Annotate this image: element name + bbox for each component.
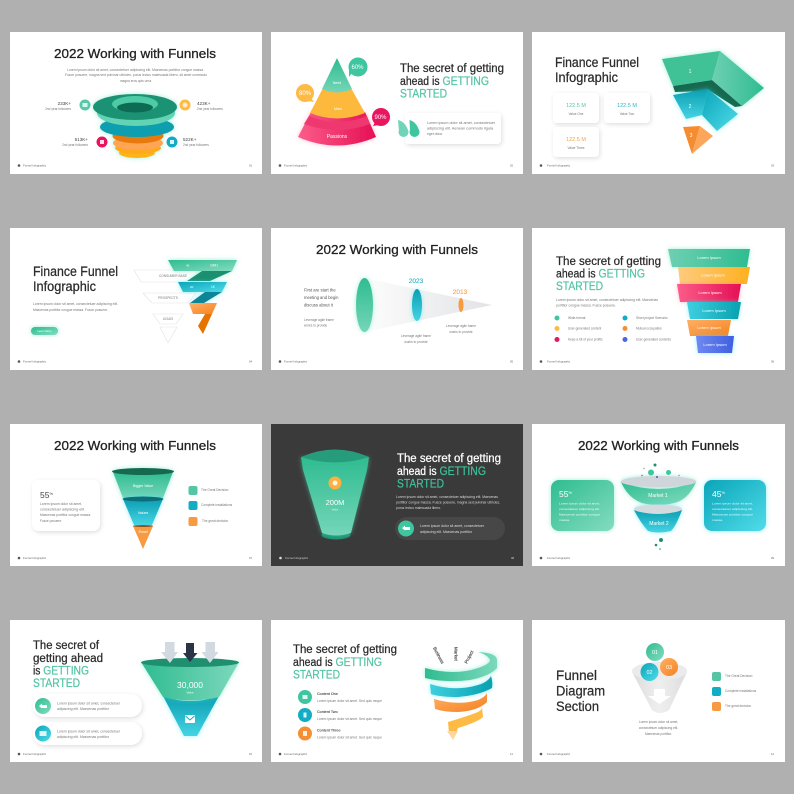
heading <box>555 55 639 85</box>
footer: Funnel Infographic <box>284 752 308 756</box>
stat 522K: 2nd year followers <box>183 143 209 147</box>
green layer: 10M1 <box>210 264 218 268</box>
heading: 2022 Working with Funnels <box>54 46 217 61</box>
teal stat card: consectetuer adipiscing elit. <box>712 507 753 511</box>
stat 423K <box>180 100 223 111</box>
stat 513K: 2nd year followers <box>62 143 88 147</box>
year 2023: 2023 <box>409 278 424 285</box>
ball 01: 01 <box>652 650 658 656</box>
intro text: Fusce posuere, magna sed pulvinar ultricies, purus lectus malesuada libero, sit amet commodo <box>65 73 207 77</box>
stat card: Maecenas porttitor congue massa. <box>40 513 91 517</box>
body text: porttitor congue massa. Fusce posuere. <box>556 304 616 308</box>
green section: 1 <box>689 69 692 75</box>
value caption: Value <box>332 508 339 512</box>
footer: Funnel Infographic <box>284 360 308 364</box>
footer <box>540 360 775 364</box>
note middle <box>401 334 431 344</box>
footer <box>540 164 775 168</box>
note left: Leverage agile frame <box>304 318 334 322</box>
footer: Funnel Infographic <box>23 360 47 364</box>
quote card: eget dolor. <box>427 132 443 136</box>
teal stat card: Lorem ipsum dolor sit amet, <box>712 502 753 506</box>
body text: porttitor congue massa. Fusce posuere, magna sed pulvinar ultricies, <box>396 500 500 504</box>
ribbon arrow tip <box>447 731 458 740</box>
heading <box>33 640 103 690</box>
stat 233K: 233K+ <box>58 101 71 106</box>
body text: purus lectus malesuada libero. <box>396 506 441 510</box>
footer: 03 <box>771 164 775 168</box>
panel: slide 1 stacked ring funnel <box>10 32 262 174</box>
orange layer <box>189 303 217 334</box>
legend: Complete installations <box>201 503 233 507</box>
panel: slide 11 spiral funnel <box>271 620 523 762</box>
value caption: Value <box>187 690 194 694</box>
footer: Funnel Infographic <box>23 164 47 168</box>
teal stat card: Maecenas porttitor congue <box>712 512 753 516</box>
footer: Funnel Infographic <box>547 164 571 168</box>
ball 02 <box>640 663 658 681</box>
value card three: 122.5 M <box>566 137 586 143</box>
panel: slide 7 three-stage funnel <box>10 424 262 566</box>
footer: Funnel Infographic <box>285 556 309 560</box>
callout pill one: Lorem ipsum dolor sit amet, consectetuer <box>57 702 121 706</box>
footer <box>18 360 253 364</box>
footer <box>18 556 253 560</box>
button: Learn More <box>37 329 52 333</box>
teal layer: 20 <box>190 285 194 289</box>
funnel <box>112 468 174 549</box>
teal stat card: % <box>721 490 725 495</box>
heading: STARTED <box>293 670 340 682</box>
heading <box>556 256 661 293</box>
heading: The secret of getting <box>397 453 501 465</box>
heading: Diagram <box>556 684 605 698</box>
footer: 07 <box>249 556 253 560</box>
funnel base <box>322 530 350 540</box>
value card three: Value Three <box>567 146 585 150</box>
caption: Lorem ipsum dolor sit amet, <box>639 720 678 724</box>
quote card <box>405 113 501 144</box>
green stat card: Maecenas porttitor congue <box>559 512 600 516</box>
funnel bowl: market 1 <box>621 476 696 505</box>
footer: Funnel Infographic <box>547 752 571 756</box>
heading <box>397 453 501 490</box>
content item three: Content Three <box>317 728 341 732</box>
icon: orange badge <box>328 476 342 490</box>
footer: Funnel Infographic <box>284 164 308 168</box>
pill callout: Lorem ipsum dolor sit amet, consectetuer <box>420 524 485 528</box>
value card two: 122.5 M <box>617 103 637 109</box>
legend: The Great Decision <box>725 674 753 678</box>
teal layer <box>178 282 227 303</box>
stat 423K: 2nd year followers <box>197 107 223 111</box>
stat 423K: 423K+ <box>197 101 211 106</box>
panel: slide 12 funnel diagram section <box>532 620 785 762</box>
rotated label project: Project <box>463 649 475 664</box>
layer teal: Lorem Ipsum <box>702 308 726 313</box>
heading: STARTED <box>556 281 603 293</box>
stat 522K: 522K+ <box>183 137 197 142</box>
heading: Finance Funnel <box>555 55 639 70</box>
footer: 09 <box>771 556 775 560</box>
body text: Lorem ipsum dolor sit amet, consectetuer adipiscing elit. Maecenas <box>556 298 658 302</box>
footer: Funnel Infographic <box>547 360 571 364</box>
heading: STARTED <box>397 478 444 490</box>
green stat card: consectetuer adipiscing elit. <box>559 507 600 511</box>
callout pill two: adipiscing elit. Maecenas porttitor <box>57 735 110 739</box>
quote card: Lorem ipsum dolor sit amet, consectetuer <box>427 121 496 125</box>
callout pill two: Lorem ipsum dolor sit amet, consectetuer <box>57 730 121 734</box>
green stat card <box>551 480 614 531</box>
intro note: meeting and begin <box>304 295 339 300</box>
stat card: 55 <box>40 490 49 500</box>
orange section: 3 <box>690 133 693 139</box>
heading: ahead is GETTING <box>556 268 645 280</box>
arrow right <box>202 642 218 663</box>
content item two <box>298 708 382 722</box>
outlined funnel shapes <box>134 270 205 343</box>
funnel bowl: market 2 <box>634 504 682 532</box>
bubble 90 percent <box>372 108 390 126</box>
legend: The Great Decision <box>201 488 229 492</box>
note left: works to provide <box>304 324 327 328</box>
heading: Infographic <box>33 279 96 294</box>
rotated label market: Market <box>454 647 458 662</box>
green layer <box>168 260 237 281</box>
value card two: Value Two <box>620 112 635 116</box>
rotated label business: Business <box>432 646 445 665</box>
body text: Lorem ipsum dolor sit amet, consectetuer adipiscing elit. Maecenas <box>396 495 498 499</box>
teal stat card: massa. <box>712 518 723 522</box>
footer: Funnel Infographic <box>23 752 47 756</box>
bullet list <box>554 316 671 342</box>
body text <box>33 302 118 312</box>
coloured funnel shapes <box>168 260 237 334</box>
heading: 2022 Working with Funnels <box>316 242 479 257</box>
intro text <box>65 68 207 83</box>
teal section: 2 <box>689 104 692 110</box>
ball 03: 03 <box>666 665 672 671</box>
content item two: Lorem ipsum dolor sit amet. Sed quis neque <box>317 717 382 721</box>
ball 01 <box>646 643 664 661</box>
caption <box>639 720 678 736</box>
teal layer: 1K <box>211 285 216 289</box>
legend: The great decision <box>202 519 228 523</box>
heading <box>400 63 504 100</box>
heading <box>33 264 118 294</box>
note right: works to provide <box>449 330 473 334</box>
pill callout <box>395 517 505 540</box>
heading <box>556 668 605 714</box>
bullet list: User generated contents <box>636 338 671 342</box>
bullet list: Wide-format <box>568 316 585 320</box>
stat 513K: 513K+ <box>75 137 88 142</box>
icon: quote marks <box>398 120 420 137</box>
note left <box>304 318 334 328</box>
layer yellow: Lorem Ipsum <box>701 272 725 278</box>
panel: slide 4 split funnel <box>10 228 262 370</box>
legend <box>188 486 233 526</box>
heading: Funnel <box>556 668 597 683</box>
funnel bowl: market 1: Market 1 <box>648 493 668 499</box>
particles top <box>641 464 680 478</box>
middle stage: Values <box>138 511 149 515</box>
panel: slide 10 arrow funnel <box>10 620 262 762</box>
ellipse green <box>356 278 373 332</box>
funnel glass <box>301 450 369 540</box>
heading: The secret of getting <box>400 63 504 75</box>
heading: ahead is GETTING <box>397 466 486 478</box>
pyramid top layer: Need <box>333 81 341 85</box>
bullet list: Mutual occupation <box>636 326 662 330</box>
footer <box>279 556 515 560</box>
pyramid graphic <box>298 58 376 146</box>
heading: The secret of getting <box>556 256 661 268</box>
layer blue: Lorem Ipsum <box>703 342 727 347</box>
value card one: Value One <box>569 112 584 116</box>
year 2013: 2013 <box>453 289 468 296</box>
green stat card: massa. <box>559 518 570 522</box>
top stage: Bigger Value <box>133 484 153 488</box>
heading <box>293 644 397 682</box>
heading: Infographic <box>555 70 618 85</box>
funnel rim <box>141 658 239 667</box>
arrow centre <box>183 643 198 662</box>
ring funnel graphic <box>93 94 177 158</box>
intro note: First are start the <box>304 288 336 292</box>
caption: Maecenas porttitor. <box>645 732 672 736</box>
footer: 08 <box>511 556 515 560</box>
green stat card: % <box>568 490 572 495</box>
funnel bowl: market 2: Market 2 <box>649 521 669 527</box>
button <box>31 327 58 335</box>
legend: Complete installations <box>725 689 757 693</box>
content item three: Lorem ipsum dolor sit amet. Sed quis neque <box>317 736 382 740</box>
body text <box>556 298 658 308</box>
legend <box>712 672 757 711</box>
panel: slide 3 3D funnel <box>532 32 785 174</box>
callout pill two <box>33 722 142 745</box>
spiral ribbon <box>425 652 497 740</box>
footer <box>279 164 514 168</box>
pyramid middle layer: Main <box>334 107 342 111</box>
stat card: % <box>49 491 53 496</box>
panel: slide 9 two-market funnel <box>532 424 785 566</box>
footer: 04 <box>249 360 253 364</box>
ribbon green <box>425 652 497 681</box>
content item two: Content Two <box>317 710 338 714</box>
bubble 80 percent <box>296 84 314 102</box>
bullet list: Short project Scenario <box>636 316 668 320</box>
footer: 10 <box>249 752 253 756</box>
value: 30,000 <box>177 680 203 690</box>
note middle: Leverage agile frame <box>401 334 431 338</box>
body text <box>396 495 500 510</box>
ball 03 <box>660 658 678 676</box>
ellipse teal <box>412 289 422 321</box>
footer <box>279 752 513 756</box>
bubble 80 percent: 80% <box>299 91 312 97</box>
value card one <box>553 93 599 123</box>
bullet list: Keep a bit of your profits <box>568 338 603 342</box>
outlined funnel shapes: PROSPECTS <box>158 296 178 300</box>
stat 513K <box>62 136 108 148</box>
heading: is GETTING <box>33 666 89 678</box>
value card one: 122.5 M <box>566 103 586 109</box>
funnel green section <box>141 662 239 700</box>
stat card <box>32 480 100 531</box>
panel: slide 5 timeline cone <box>271 228 523 370</box>
stat 522K <box>166 136 209 148</box>
bubble 90 percent: 90% <box>374 115 387 121</box>
icon: envelope <box>185 715 195 723</box>
content item one <box>298 690 382 704</box>
content item one: Lorem ipsum dolor sit amet. Sed quis neque <box>317 699 382 703</box>
caption: consectetuer adipiscing elit. <box>639 726 678 730</box>
outlined funnel shapes: LEADS <box>163 317 173 321</box>
footer: 01 <box>249 164 253 168</box>
stat 233K <box>45 100 90 111</box>
bubble 60 percent <box>348 58 368 77</box>
footer: 02 <box>510 164 514 168</box>
icon: down arrow <box>648 689 671 704</box>
grey funnel <box>632 662 687 713</box>
footer <box>18 752 253 756</box>
footer: 11 <box>510 752 513 756</box>
funnel teal section <box>163 696 219 736</box>
intro text: Lorem ipsum dolor sit amet, consectetuer adipiscing elit. Maecenas porttitor congue massa. <box>67 68 204 72</box>
heading: ahead is GETTING <box>293 657 382 669</box>
footer: 05 <box>510 360 514 364</box>
intro note: discuss about it <box>304 302 334 308</box>
footer: Funnel Infographic <box>547 556 571 560</box>
body text: Maecenas porttitor congue massa. Fusce posuere. <box>33 308 108 312</box>
content item one: Content One <box>317 692 338 696</box>
ribbon orange <box>434 693 487 712</box>
footer <box>279 360 514 364</box>
pill callout: adipiscing elit. Maecenas porttitor <box>420 530 473 534</box>
note middle: works to provide <box>404 340 428 344</box>
funnel body <box>301 457 369 536</box>
note right <box>446 324 476 334</box>
layer orange: Lorem Ipsum <box>697 325 721 330</box>
particles bottom <box>655 538 663 550</box>
green stat card: Lorem ipsum dolor sit amet, <box>559 502 600 506</box>
bullet list: User generated content <box>568 326 601 330</box>
layer pink: Lorem Ipsum <box>698 290 722 295</box>
ribbon yellow tail <box>448 707 483 733</box>
bottom stage: Small <box>138 530 148 534</box>
intro note <box>304 288 339 308</box>
footer <box>540 556 775 560</box>
value card two <box>604 93 650 123</box>
heading: STARTED <box>33 678 80 690</box>
pyramid base layer: Passions <box>327 134 348 140</box>
stat card: Lorem ipsum dolor sit amet, <box>40 502 82 506</box>
stat 233K: 2nd year followers <box>45 107 71 111</box>
footer <box>540 752 775 756</box>
funnel <box>141 658 239 736</box>
callout pill one: adipiscing elit. Maecenas porttitor <box>57 707 110 711</box>
callout pill one <box>33 694 142 717</box>
teal stat card <box>704 480 766 531</box>
funnel opening <box>301 450 369 462</box>
heading: getting ahead <box>33 653 103 665</box>
green layer: 40 <box>186 264 190 268</box>
layer green: Lorem Ipsum <box>697 255 721 260</box>
panel: slide 2 pyramid <box>271 32 523 174</box>
legend: The great decision <box>725 704 751 708</box>
teal stat card: 45 <box>712 489 721 499</box>
heading: The secret of getting <box>293 644 397 656</box>
heading: The secret of <box>33 640 100 652</box>
arrow left <box>161 642 178 663</box>
heading: 2022 Working with Funnels <box>54 438 217 453</box>
outlined funnel shapes: CONSUMER BASE <box>159 274 187 278</box>
heading: Finance Funnel <box>33 264 118 279</box>
footer: Funnel Infographic <box>23 556 47 560</box>
stat card: Fusce posuere. <box>40 519 62 523</box>
funnel layers <box>668 249 750 353</box>
intro text: magna eros quis urna. <box>120 79 152 83</box>
cone <box>364 278 492 332</box>
bubble 60 percent: 60% <box>351 65 364 71</box>
footer <box>18 164 253 168</box>
quote card: adipiscing elit. Aenean commodo ligula <box>427 126 493 130</box>
ellipse orange <box>458 298 464 312</box>
value 200M: 200M <box>326 498 344 507</box>
ribbon teal <box>430 676 492 697</box>
heading: 2022 Working with Funnels <box>578 438 740 453</box>
stat card: consectetuer adipiscing elit. <box>40 508 85 512</box>
panel: slide 6 six-layer funnel <box>532 228 785 370</box>
value card three <box>553 127 599 157</box>
heading: Section <box>556 699 599 714</box>
content item three <box>298 726 382 740</box>
body text: Lorem ipsum dolor sit amet, consectetuer adipiscing elit. <box>33 302 118 306</box>
green stat card: 55 <box>559 489 568 499</box>
note right: Leverage agile frame <box>446 324 476 328</box>
footer: 12 <box>771 752 775 756</box>
footer: 06 <box>771 360 775 364</box>
heading: ahead is GETTING <box>400 76 489 88</box>
ball 02: 02 <box>646 670 653 676</box>
3D funnel graphic <box>662 51 764 154</box>
panel: slide 8 dark funnel <box>271 424 523 566</box>
heading: STARTED <box>400 88 447 100</box>
